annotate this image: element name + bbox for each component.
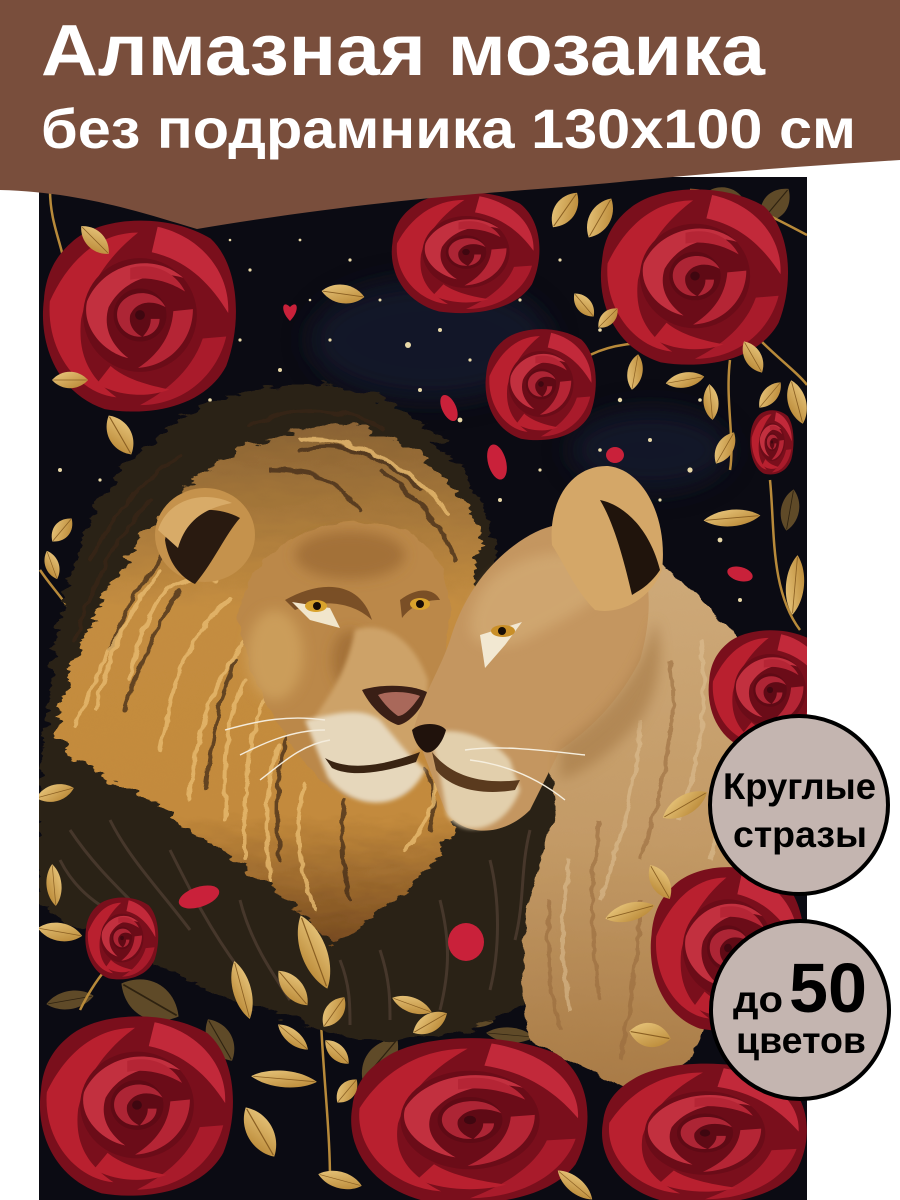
lion eyes <box>292 598 430 628</box>
roses <box>40 189 831 1200</box>
lioness chest fur strokes <box>560 639 716 1012</box>
golden leaves <box>34 187 812 1200</box>
lioness muzzle <box>430 731 520 829</box>
star field <box>58 238 742 602</box>
lion mouth shadow <box>325 752 420 773</box>
lion nose <box>362 686 427 725</box>
lioness nose <box>412 724 446 753</box>
badge: up to 50 colours: цветов <box>736 1020 866 1061</box>
lion lower fur strands <box>60 820 530 1025</box>
banner heading line 1: Алмазная мозаика <box>41 11 766 91</box>
night sky background <box>39 177 807 1200</box>
mane highlights <box>75 439 450 910</box>
banner heading line 2: без подрамника 130х100 см <box>41 97 856 160</box>
badge: up to 50 colours: до <box>733 979 783 1020</box>
lion snout <box>310 627 428 759</box>
badge: round rhinestones <box>710 716 888 894</box>
lioness body <box>521 564 737 1086</box>
lioness neck shadow <box>560 620 660 780</box>
lioness whiskers <box>465 748 585 800</box>
lioness head <box>414 523 649 831</box>
badge: round rhinestones: стразы <box>733 814 867 855</box>
lioness chest shadow strokes <box>548 660 673 1060</box>
lion muzzle white <box>305 712 425 803</box>
lioness eye <box>480 622 522 668</box>
red petals <box>176 304 754 961</box>
badge: up to 50 colours: 50 <box>789 949 867 1027</box>
lion whiskers <box>225 718 330 780</box>
illustration: lions and roses <box>34 177 831 1200</box>
mane dark strands <box>75 411 455 900</box>
lioness ear <box>552 466 663 611</box>
badge: round rhinestones: Круглые <box>723 766 876 807</box>
lion brow shading <box>285 587 440 620</box>
lioness head highlight <box>471 553 588 645</box>
dark olive foliage <box>45 181 803 1089</box>
lion face <box>238 522 450 802</box>
lion dark mane and fur <box>39 385 565 1040</box>
badge: up to 50 colours <box>711 921 889 1099</box>
lion golden mane <box>55 425 482 945</box>
lioness mouth line <box>432 752 520 792</box>
blue night haze <box>310 280 730 490</box>
lion face shading <box>247 531 405 700</box>
golden stems <box>40 190 807 1180</box>
lion ear <box>155 488 255 584</box>
top brown banner <box>0 0 900 229</box>
